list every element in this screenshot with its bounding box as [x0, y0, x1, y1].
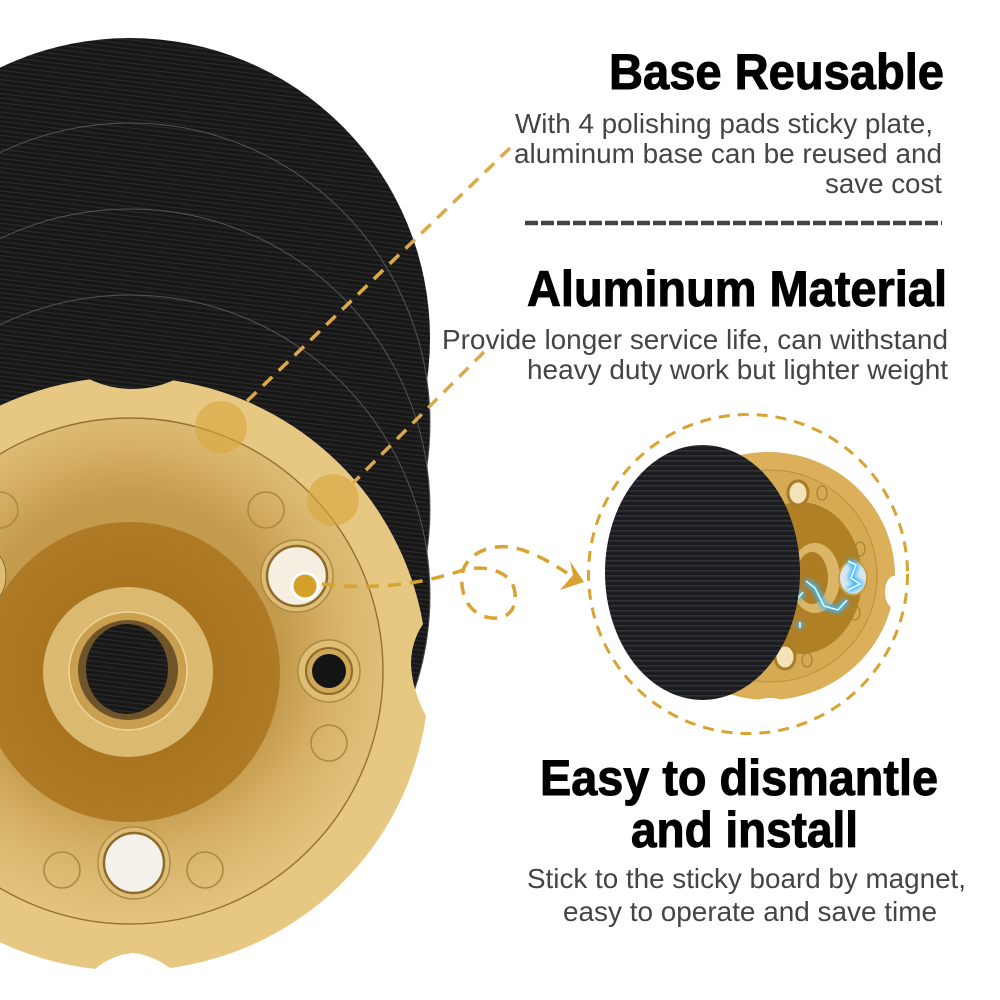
text: dismantle description: Stick to the sticky board by magnet, [527, 863, 966, 894]
magnet left edge [0, 540, 6, 612]
plate outline with notches [0, 379, 426, 969]
magnet bottom [98, 827, 170, 899]
text: dismantle description [527, 863, 966, 927]
text: base reusable description: aluminum base can be reused and [514, 138, 942, 169]
text: base reusable description [514, 108, 942, 199]
leader line: base reusable [243, 148, 510, 405]
highlight dot: base [195, 401, 247, 453]
magnet upper right [261, 540, 333, 612]
title: Base Reusable: Base Reusable [609, 44, 944, 100]
text: aluminum description [442, 324, 948, 385]
leader line: aluminum material [353, 352, 484, 483]
title: Aluminum Material: Aluminum Material [527, 261, 947, 317]
inner ring [0, 418, 383, 924]
title: Easy to dismantle and install: Easy to dismantle [540, 750, 938, 806]
divider [525, 221, 942, 225]
looping dashed arrow [322, 547, 584, 618]
text: aluminum description: Provide longer service life, can withstand [442, 324, 948, 355]
small gold plate [641, 439, 903, 714]
stack of black sticky pads [0, 38, 430, 895]
dashed circle [588, 414, 908, 734]
small screw hole right [298, 640, 360, 702]
title: Easy to dismantle and install: and install [631, 802, 858, 858]
center collar [43, 587, 213, 757]
aluminum gold base plate [0, 379, 426, 969]
highlight dot: material [307, 474, 359, 526]
brown recess [0, 522, 280, 822]
text: dismantle description: easy to operate and save time [563, 896, 937, 927]
small black pad [605, 445, 800, 700]
magnet marker dot [292, 573, 318, 599]
text: base reusable description: With 4 polishing pads sticky plate, [515, 108, 933, 139]
dimples [0, 492, 347, 888]
text: aluminum description: heavy duty work but lighter weight [527, 354, 948, 385]
inset: pad attaching to plate [605, 439, 903, 714]
title: Easy to dismantle and install [540, 750, 938, 858]
center hole [86, 624, 168, 714]
lightning effect [798, 561, 860, 628]
text: base reusable description: save cost [825, 168, 942, 199]
